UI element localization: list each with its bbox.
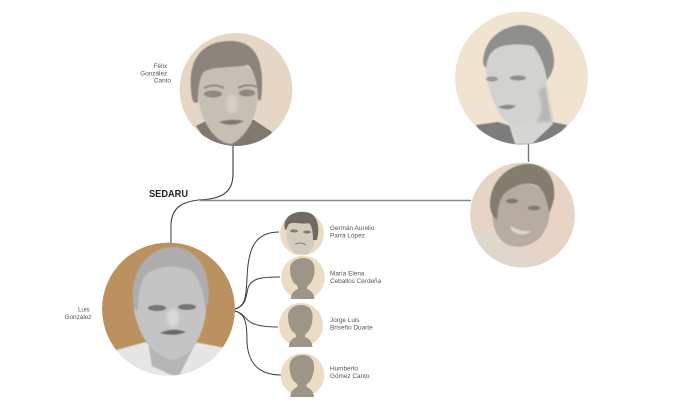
- label: María Elena Ceballos Cerdeña: María Elena: [330, 270, 365, 278]
- organization chart: [64, 12, 588, 397]
- portrait: Jorge Luis silhouette: [279, 303, 323, 347]
- portrait: Germán Aurelio Parra López: [280, 212, 324, 256]
- label: Humberto Gómez Canto: Gómez Canto: [330, 373, 370, 380]
- label: Jorge Luis Briseño Duarte: Briseño Duarte: [330, 324, 373, 332]
- portrait: María Elena silhouette: [281, 256, 325, 299]
- label: Humberto Gómez Canto: Humberto: [330, 366, 359, 372]
- label: Félix González Canto: González: [140, 70, 167, 77]
- portrait: top right man: [455, 12, 588, 150]
- heading: SEDARU: SEDARU: [149, 188, 188, 200]
- portrait: Félix González Canto: [180, 33, 292, 150]
- label: Luis González: Luis: [78, 306, 90, 314]
- label: Jorge Luis Briseño Duarte: Jorge Luis: [330, 317, 360, 324]
- connector: Félix to SEDARU: [171, 146, 471, 243]
- label: Luis González: González: [64, 314, 92, 321]
- connector: top right to lower right portrait: [528, 143, 530, 162]
- connectors: Luis González to team: [235, 232, 281, 375]
- label: Félix González Canto: Canto: [154, 78, 171, 85]
- label: Germán Aurelio Parra López: Parra López: [330, 232, 365, 240]
- label: María Elena Ceballos Cerdeña: Ceballos Cerdeña: [330, 278, 382, 285]
- portrait: Luis González: [102, 242, 235, 382]
- portrait: Humberto silhouette: [281, 353, 324, 397]
- label: Germán Aurelio Parra López: Germán Aurelio: [330, 225, 375, 232]
- label: Félix González Canto: Félix: [154, 63, 168, 70]
- portrait: lower right man: [470, 162, 575, 272]
